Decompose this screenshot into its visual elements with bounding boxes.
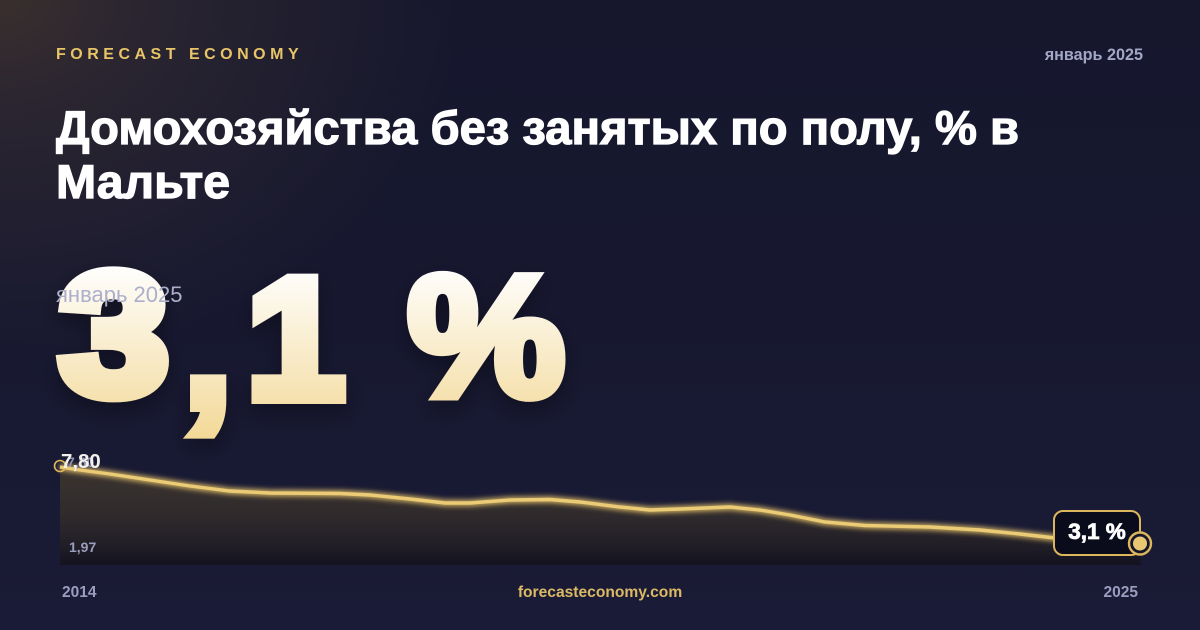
line glow [60,467,1140,544]
date top right: январь 2025 [1044,46,1143,64]
title: Домохозяйства без занятых по полу, % в [56,101,1019,154]
big value: , [184,251,232,443]
x axis start year: 2014 [62,584,97,601]
x axis end year: 2025 [1104,584,1138,601]
footer site: forecasteconomy.com [518,584,682,601]
max label: 7,80 [61,451,101,473]
data line [60,467,1140,544]
big value: % [408,240,565,432]
end marker [1129,532,1151,554]
start marker [54,460,66,472]
big value: 3 [60,238,168,430]
title: Мальте [56,155,230,208]
value callout: 3,1 % [1068,519,1126,544]
big value: 1 [246,242,345,434]
brand label: FORECAST ECONOMY [56,46,303,63]
date subtitle over value: январь 2025 [56,282,182,307]
title [56,101,1019,208]
line chart [54,451,1151,565]
value callout [1054,511,1140,555]
big value [60,238,565,443]
max label shadow: 7,80 [67,454,94,470]
chart area fill [60,467,1141,565]
min label: 1,97 [69,539,96,555]
